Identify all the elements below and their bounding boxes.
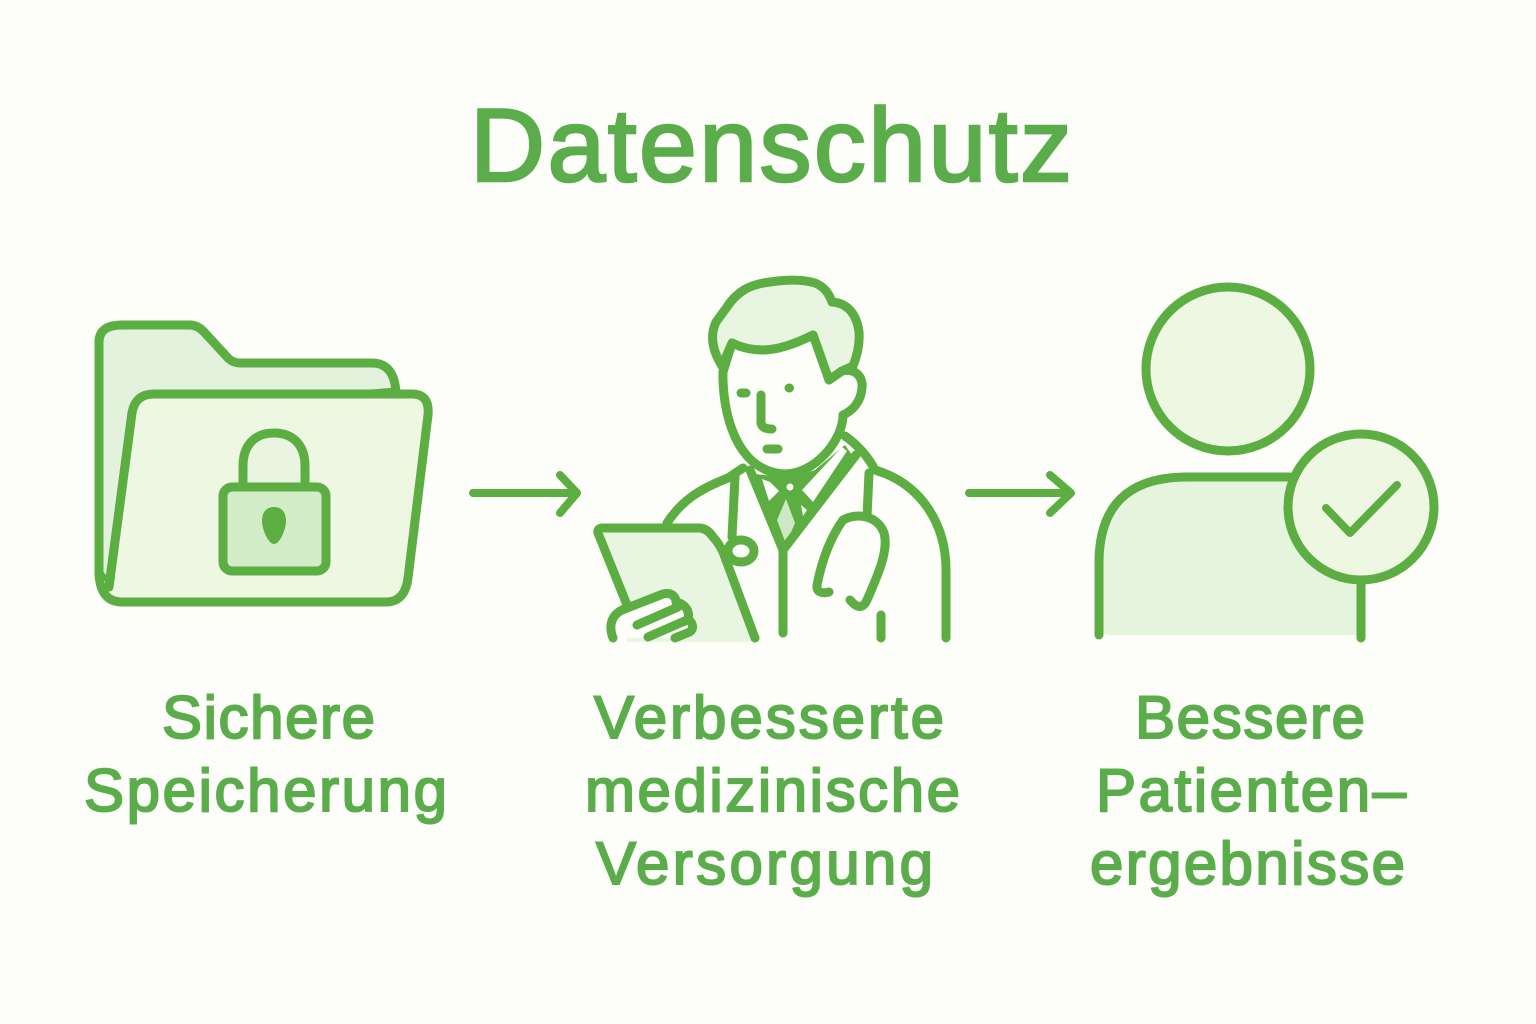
doctor hair: [713, 280, 859, 380]
padlock shackle: [243, 433, 305, 484]
doctor face: [723, 335, 862, 474]
label: better patient outcomes: Bessere: [1135, 684, 1365, 751]
patient head: [1146, 287, 1310, 451]
badge stem: [1356, 583, 1366, 638]
necktie: [777, 499, 795, 544]
icon: folder with padlock: [99, 325, 428, 602]
label: secure storage: Speicherung: [84, 757, 447, 824]
fingers: [637, 607, 687, 637]
check badge: [1288, 434, 1434, 580]
label: better patient outcomes: Patienten–: [1096, 757, 1407, 824]
stethoscope: [732, 473, 885, 607]
small shirt white: [801, 505, 807, 516]
keyhole: [262, 507, 286, 544]
doctor eyes, nose and mouth: [741, 388, 790, 449]
patient body fill: [1103, 481, 1358, 635]
arrow: care to outcomes: [969, 475, 1071, 513]
label: improved medical care: Verbesserte: [594, 684, 944, 751]
title: Datenschutz: [470, 88, 1072, 204]
folder front: [99, 394, 428, 602]
label: better patient outcomes: [1090, 684, 1407, 897]
label: improved medical care: medizinische: [585, 757, 960, 824]
tablet outline: [598, 528, 755, 638]
padlock body: [223, 487, 326, 571]
label: improved medical care: Versorgung: [596, 830, 933, 897]
icon: doctor with tablet and stethoscope: [598, 280, 946, 642]
collar knot: [786, 484, 794, 490]
label: secure storage: [84, 684, 447, 824]
shirt and collar area: [755, 445, 852, 548]
label: better patient outcomes: ergebnisse: [1090, 830, 1405, 897]
stethoscope chest piece: [728, 540, 754, 562]
doctor coat: [667, 436, 946, 638]
arrow: storage to care: [473, 475, 577, 513]
label: secure storage: Sichere: [162, 684, 375, 751]
left collar white: [762, 479, 779, 501]
patient body outline: [1099, 477, 1290, 635]
tablet: [598, 528, 752, 642]
folder back: [99, 325, 396, 587]
icon: patient with check badge: [1099, 287, 1434, 638]
hand holding tablet: [611, 594, 693, 638]
label: improved medical care: [585, 684, 960, 897]
check mark: [1326, 485, 1397, 533]
right collar white: [802, 447, 847, 502]
